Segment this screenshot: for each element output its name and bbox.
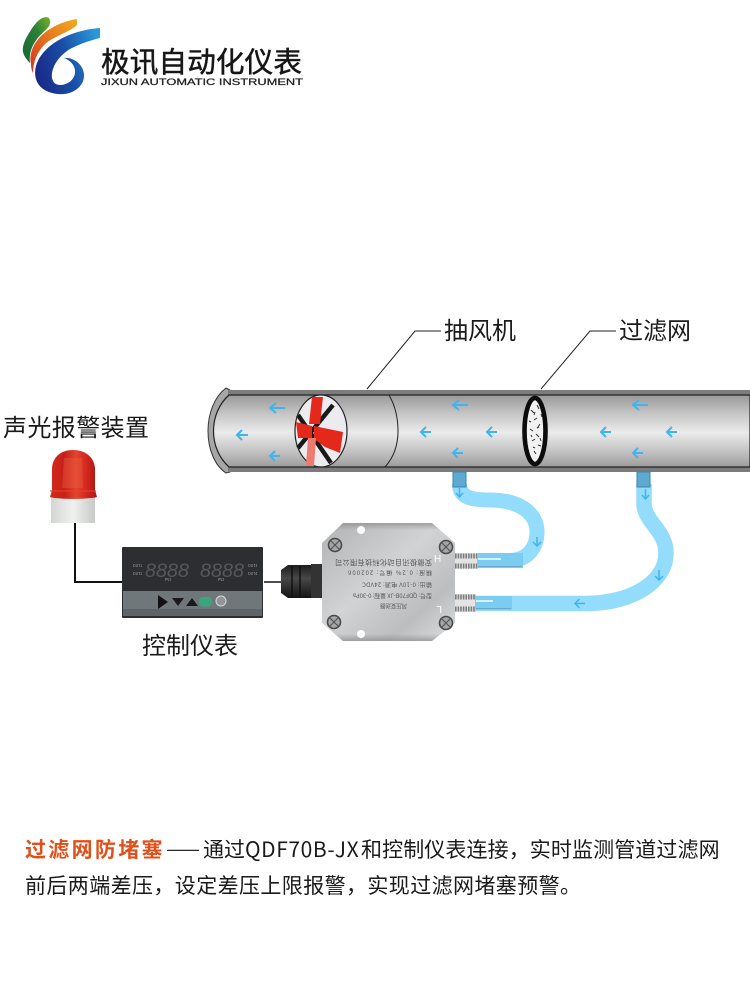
differential pressure transmitter: [322, 523, 523, 641]
controller keypad panel: [123, 591, 262, 616]
transmitter body: [322, 523, 455, 641]
indicator labels: OUT2: [133, 572, 142, 577]
upside-down nameplate text: 精度: 0.2% 编号: 202006: [347, 568, 432, 578]
fan blades: [296, 397, 343, 466]
controller: [122, 547, 263, 618]
indicator labels: OUT1: [133, 564, 142, 569]
controller wire: [264, 581, 282, 583]
leader: filter: [541, 331, 616, 389]
description text: [25, 834, 720, 900]
label: alarm: 声光报警装置: [3, 408, 149, 443]
upside-down nameplate text: 输出: 0-10V 电源: 24VDC: [362, 580, 432, 590]
pipe: [208, 388, 750, 473]
barb fitting H: [477, 553, 523, 568]
fan housing: [295, 395, 347, 467]
upside-down nameplate text: [335, 557, 432, 610]
label: controller: 控制仪表: [142, 626, 238, 661]
airflow arrows in pipe: [237, 400, 677, 461]
tube arrows: [456, 488, 663, 608]
threaded fitting L: [455, 594, 476, 612]
description line 1: QDF70B-JX: [245, 834, 359, 864]
alarm wire: [75, 523, 122, 582]
threaded fitting H: [455, 553, 478, 569]
description line 1: ——: [166, 837, 200, 862]
indicator labels: PV2: [218, 578, 224, 583]
upside-down nameplate text: 风压变送器: [380, 602, 407, 610]
port label H: H: [434, 554, 441, 565]
logo: [23, 17, 303, 94]
alarm base: [51, 497, 95, 523]
alarm light: [50, 450, 97, 523]
label: fan: 抽风机: [444, 311, 516, 346]
pressure port 2: [637, 472, 650, 487]
description line 2: 前后两端差压，设定差压上限报警，实现过滤网堵塞预警。: [25, 870, 581, 900]
pipe body: [214, 395, 750, 467]
leader: fan: [367, 331, 441, 389]
description line 1: 过滤网防堵塞: [25, 834, 165, 864]
upside-down nameplate text: 安徽极讯自动化科技有限公司: [335, 557, 432, 567]
display PV1: 8888: [145, 561, 189, 582]
mounting holes: [357, 526, 365, 534]
logo emblem: [23, 17, 100, 94]
pipe outer wall: [228, 390, 750, 472]
port label L: L: [436, 603, 442, 614]
filter screen: [524, 398, 546, 464]
label: filter: 过滤网: [619, 311, 691, 346]
controller front: [122, 547, 263, 618]
indicator labels: OUT3: [248, 564, 257, 569]
indicator labels: [133, 564, 257, 583]
indicator labels: OUT4: [248, 572, 257, 577]
display PV2: 8888: [200, 561, 244, 582]
pressure port 1: [453, 472, 466, 487]
keypad buttons: [158, 595, 226, 609]
indicator labels: PV1: [165, 578, 171, 583]
screws: [328, 538, 452, 630]
logo subtitle: JIXUN AUTOMATIC INSTRUMENT: [101, 77, 303, 88]
description line 1: 和控制仪表连接，实时监测管道过滤网: [361, 834, 720, 864]
air tube 1: [460, 484, 537, 560]
description line 1: 通过: [203, 834, 245, 864]
screw slots: [330, 541, 450, 627]
alarm dome: [50, 450, 97, 499]
cable gland: [281, 564, 323, 598]
upside-down nameplate text: 型号: QDF70B-JX 量程: 0-30Pa: [353, 592, 432, 600]
pipe seam: [385, 395, 398, 467]
barb fitting L: [475, 596, 512, 610]
pipe left flange: [208, 388, 230, 473]
logo name: 极讯自动化仪表: [101, 40, 302, 81]
fan: [295, 395, 347, 467]
air tube 2: [472, 484, 666, 604]
